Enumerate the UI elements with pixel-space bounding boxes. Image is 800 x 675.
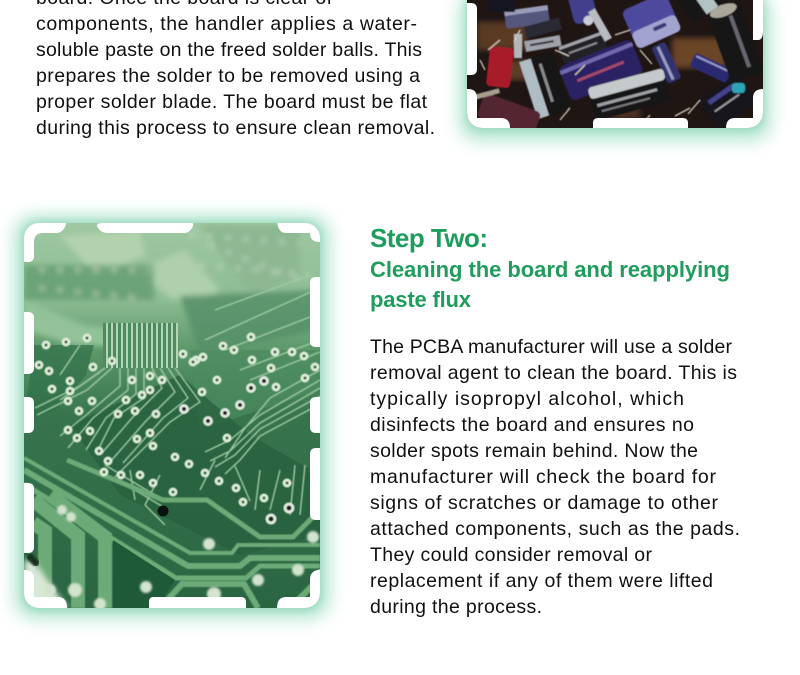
white notches: capacitor card — [462, 0, 763, 133]
intro text: step one description: components, the handler applies a water- — [36, 13, 417, 35]
body text: step two description: manufacturer will check the board for — [370, 466, 716, 488]
subheading: step description: Cleaning the board and reapplying — [370, 257, 730, 282]
image card: electrolytic capacitors — [458, 0, 772, 142]
body text: step two description: They could consider removal or — [370, 544, 652, 566]
trace bundle — [103, 323, 178, 368]
body text: step two description: removal agent to clean the board. This is — [370, 362, 737, 384]
body text: step two description: signs of scratches or damage to other — [370, 492, 718, 514]
intro text: step one description: soluble paste on the freed solder balls. This — [36, 39, 422, 61]
subheading: step description: paste flux — [370, 287, 472, 312]
body text: step two description: typically isopropyl alcohol, which — [370, 388, 684, 410]
body text: step two description: replacement if any of them were lifted — [370, 570, 713, 592]
thick diagonal traces — [24, 458, 320, 608]
body text: step two description: The PCBA manufacturer will use a solder — [370, 336, 732, 358]
intro text: step one description: proper solder blade. The board must be flat — [36, 91, 428, 113]
image card: green circuit board — [13, 214, 331, 620]
dark board surface — [27, 345, 94, 410]
subheading: step description — [370, 257, 730, 312]
intro text: step one description: prepares the solder to be removed using a — [36, 65, 420, 87]
intro text: step one description: during this process to ensure clean removal. — [36, 117, 435, 139]
body text: step two description: solder spots remain behind. Now the — [370, 440, 698, 462]
body text: step two description — [370, 336, 740, 618]
heading: step title: Step Two: — [370, 223, 488, 253]
solder pads — [36, 334, 318, 505]
body text: step two description: disinfects the board and ensures no — [370, 414, 694, 436]
intro text: step one description — [36, 0, 435, 139]
body text: step two description: during the process. — [370, 596, 542, 618]
blurred upper board area — [24, 225, 320, 355]
body text: step two description: attached components, such as the pads. — [370, 518, 740, 540]
step two heading — [370, 223, 730, 312]
white notches: circuit card — [19, 218, 325, 613]
